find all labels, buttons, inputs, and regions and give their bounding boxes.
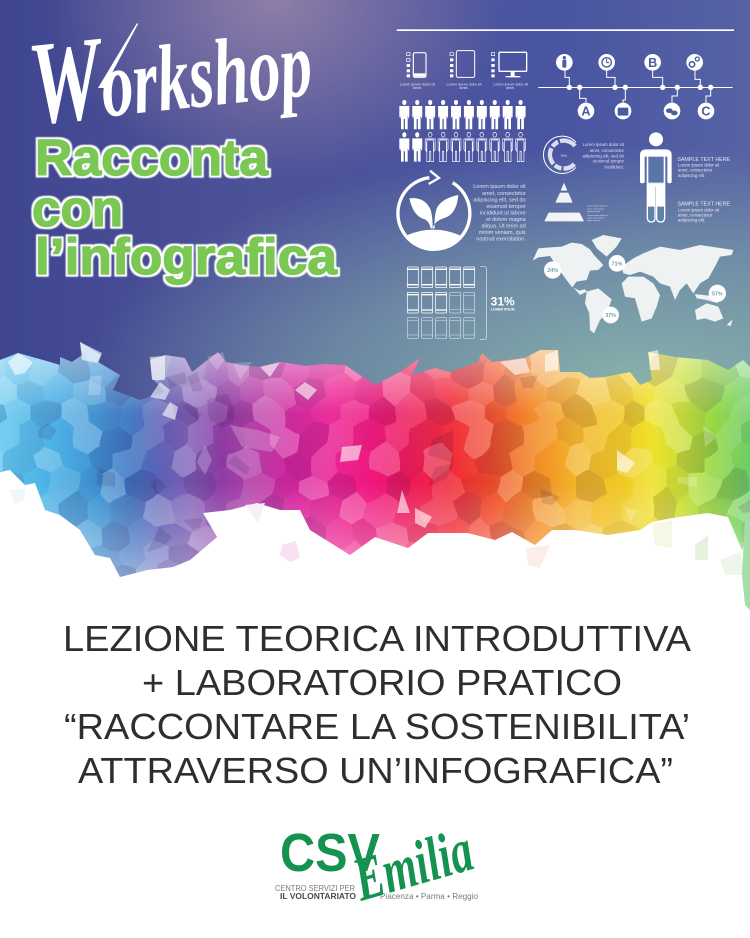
sample text: SAMPLE TEXT HERE [677,157,731,163]
CSV Emilia logo [275,816,480,915]
plant lorem text: Lorem ipsum dolor sit [473,184,526,190]
faded mosaic fragments [10,488,750,610]
donut lorem text: adipiscing elit, sed do [583,153,625,158]
main description text: + LABORATORIO PRATICO [142,662,622,703]
phones pictogram [407,267,515,339]
map percentages [544,255,726,323]
plant lorem text: aliqua. Ut enim ad [481,224,526,230]
device icons: Lorem ipsum dolor sit [447,82,481,86]
green title: Racconta con l'infografica: l’infografica [35,228,338,285]
sample text: Lorem ipsum dolor sit [678,163,720,168]
device icons: amet. [506,86,515,90]
device icons: Lorem ipsum dolor sit [400,82,435,86]
device icons: amet. [459,86,469,90]
infographic icons panel [397,29,734,339]
workshop script title: Workshop [23,0,317,150]
CSV Emilia logo: Emilia [345,816,480,915]
device icons [400,51,528,90]
CSV Emilia logo: CENTRO SERVIZI PER [275,883,355,893]
device icons: Lorem ipsum dolor sit [493,82,528,86]
sample text: adipiscing elit. [678,173,705,178]
CSV Emilia logo: CSV [280,823,380,883]
donut lorem text [583,142,625,169]
pyramid: amet, consectetur [587,207,604,210]
green title: Racconta con l'infografica: con [32,180,123,237]
sample text [677,157,731,223]
donut chart 70%: 70% [560,154,567,158]
donut chart 70% [543,136,576,173]
donut lorem text: eiusmod tempor [593,159,625,164]
sample text: Lorem ipsum dolor sit [678,207,720,212]
world map [533,235,733,333]
main description text: LEZIONE TEORICA INTRODUTTIVA [63,618,691,659]
green title: Racconta con l'infografica: Racconta [35,129,269,186]
plant lorem text: incididunt ut labore [480,211,526,217]
timeline: A [581,105,591,119]
plant lorem text: minim veniam, quis [479,230,526,236]
background gradient [0,0,750,430]
people pictogram [399,100,526,162]
pyramid: Lorem ipsum dolor sit [587,214,608,217]
CSV Emilia logo: IL VOLONTARIATO [280,891,356,901]
main description text: ATTRAVERSO UN’INFOGRAFICA” [78,750,673,791]
donut lorem text: amet, consectetur [590,148,625,153]
donut lorem text: Lorem ipsum dolor sit [583,142,625,147]
green title: Racconta con l'infografica [32,129,338,285]
sample text: adipiscing elit. [678,218,705,223]
main description text [63,618,691,791]
large person figure [640,132,672,223]
plant lorem text: amet, consectetur [482,191,526,197]
timeline: C [701,105,711,119]
timeline: B [648,56,657,70]
device icons: amet. [413,86,422,90]
donut lorem text: incididunt. [604,164,624,169]
CSV Emilia logo: Piacenza • Parma • Reggio [380,891,478,901]
timeline [538,54,733,119]
map percentages: 37% [605,313,616,319]
pyramid: Lorem ipsum dolor sit [587,205,608,208]
phones pictogram: 31% [491,294,515,308]
plant lorem text: eiusmod tempor [486,204,526,210]
plant in circle icon [398,171,470,250]
pyramid: amet, consectetur [587,217,604,220]
plant lorem text [473,184,527,243]
pyramid [544,183,608,222]
phones pictogram: LOREM IPSUM [491,308,515,312]
map percentages: 71% [612,261,623,267]
plant lorem text: adipiscing elit, sed do [473,198,526,204]
plant lorem text: nostrud exercitation. [476,237,526,243]
map percentages: 57% [712,291,723,297]
sample text: SAMPLE TEXT HERE [677,202,731,208]
top rule [397,29,734,31]
sample text: amet, consectetur [678,168,713,173]
sample text: amet, consectetur [678,212,713,217]
map percentages: 24% [547,268,558,274]
plant lorem text: et dolore magna [486,217,527,223]
pyramid: adipiscing elit [587,219,600,222]
pyramid: adipiscing elit [587,210,600,213]
main description text: “RACCONTARE LA SOSTENIBILITA’ [64,706,690,747]
colour mosaic band [0,342,750,577]
